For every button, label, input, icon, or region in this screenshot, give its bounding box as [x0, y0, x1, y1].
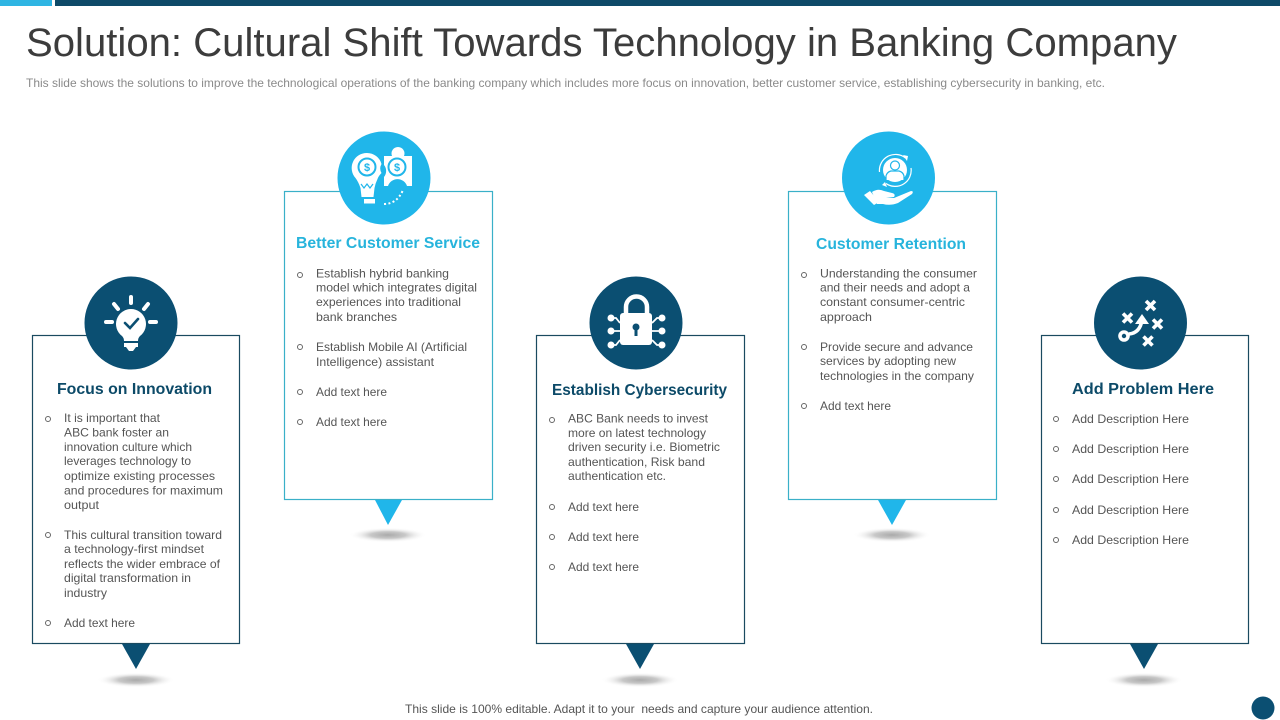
panel: customer retention [788, 132, 996, 542]
bullet list: constant consumer-centric [820, 295, 965, 309]
bullet list: Add text here [64, 616, 135, 630]
bullet list: industry [64, 586, 107, 600]
bullet list: more on latest technology [568, 426, 706, 440]
pointer [349, 500, 427, 542]
bullet list: Understanding the consumer [820, 266, 977, 280]
bullet list [298, 266, 477, 429]
bullet list: a technology-first mindset [64, 542, 205, 556]
bullet list: optimize existing processes [64, 469, 215, 483]
heading: Better Customer Service [296, 235, 480, 252]
bullet list: authentication etc. [568, 469, 666, 483]
panel: better customer service [284, 132, 492, 542]
bullet list: services by adopting new [820, 354, 956, 368]
subtitle: This slide shows the solutions to improve the technological operations of the banking company which includes more focus on innovation, better customer service, establishing cybersecurity in banking, etc. [26, 76, 1105, 90]
card box [32, 336, 240, 644]
top accent bar [0, 0, 1280, 6]
footer note: This slide is 100% editable. Adapt it to your needs and capture your audience attention. [405, 702, 873, 716]
bullet list: Add Description Here [1072, 412, 1189, 426]
bullet list: Add text here [568, 500, 639, 514]
pointer [853, 500, 931, 542]
bullet list: output [64, 498, 100, 512]
bullet list: This cultural transition toward [64, 528, 222, 542]
bullet list: Establish hybrid banking [316, 266, 449, 280]
icon: idea bulb and puzzle with dollars [338, 132, 430, 224]
bullet list: Add Description Here [1072, 442, 1189, 456]
bullet list [46, 411, 223, 630]
icon: idea bulb and puzzle with dollars: $ [394, 162, 400, 174]
icon: idea bulb and puzzle with dollars: $ [364, 162, 370, 174]
bullet list [1054, 412, 1189, 547]
bullet list: Add text here [316, 415, 387, 429]
card box [284, 192, 492, 500]
page marker dot [1252, 696, 1274, 720]
bullet list: bank branches [316, 310, 397, 324]
bullet list: Add Description Here [1072, 503, 1189, 517]
panel: establish cybersecurity [536, 276, 744, 688]
bullet list: It is important that [64, 411, 161, 425]
icon: light bulb with check [84, 276, 178, 370]
icon: digital padlock [590, 276, 682, 370]
heading: Establish Cybersecurity [552, 382, 727, 399]
heading: Add Problem Here [1072, 381, 1214, 398]
bullet list: Establish Mobile AI (Artificial [316, 340, 467, 354]
pointer [97, 644, 175, 688]
bullet list: and their needs and adopt a [820, 280, 970, 294]
card box [536, 336, 744, 644]
pointer [601, 644, 679, 688]
bullet list [550, 412, 720, 574]
bullet list: Add Description Here [1072, 472, 1189, 486]
bullet list: driven security i.e. Biometric [568, 440, 720, 454]
bullet list: Provide secure and advance [820, 340, 973, 354]
bullet list: experiences into traditional [316, 295, 461, 309]
bullet list: innovation culture which [64, 440, 192, 454]
heading: Focus on Innovation [57, 381, 212, 398]
icon: hand holding customer [842, 132, 935, 224]
bullet list: Add Description Here [1072, 533, 1189, 547]
bullet list: authentication, Risk band [568, 455, 705, 469]
bullet list: approach [820, 310, 872, 324]
bullet list: leverages technology to [64, 454, 191, 468]
bullet list: Add text here [316, 385, 387, 399]
title: Solution: Cultural Shift Towards Technology in Banking Company [26, 21, 1177, 65]
bullet list: technologies in the company [820, 369, 974, 383]
bullet list: model which integrates digital [316, 280, 477, 294]
bullet list: ABC Bank needs to invest [568, 412, 709, 426]
panel: focus on innovation [32, 276, 240, 688]
card box [1042, 336, 1248, 644]
bullet list: Intelligence) assistant [316, 355, 435, 369]
bullet list: reflects the wider embrace of [64, 557, 221, 571]
icon: strategy play [1094, 276, 1187, 370]
panel: add problem here [1042, 276, 1248, 688]
heading: Customer Retention [816, 236, 966, 253]
bullet list: Add text here [820, 399, 891, 413]
bullet list: ABC bank foster an [64, 426, 169, 440]
bullet list: Add text here [568, 530, 639, 544]
bullet list [802, 266, 977, 413]
pointer [1105, 644, 1183, 688]
bullet list: digital transformation in [64, 571, 191, 585]
bullet list: Add text here [568, 560, 639, 574]
bullet list: and procedures for maximum [64, 484, 223, 498]
card box [788, 192, 996, 500]
